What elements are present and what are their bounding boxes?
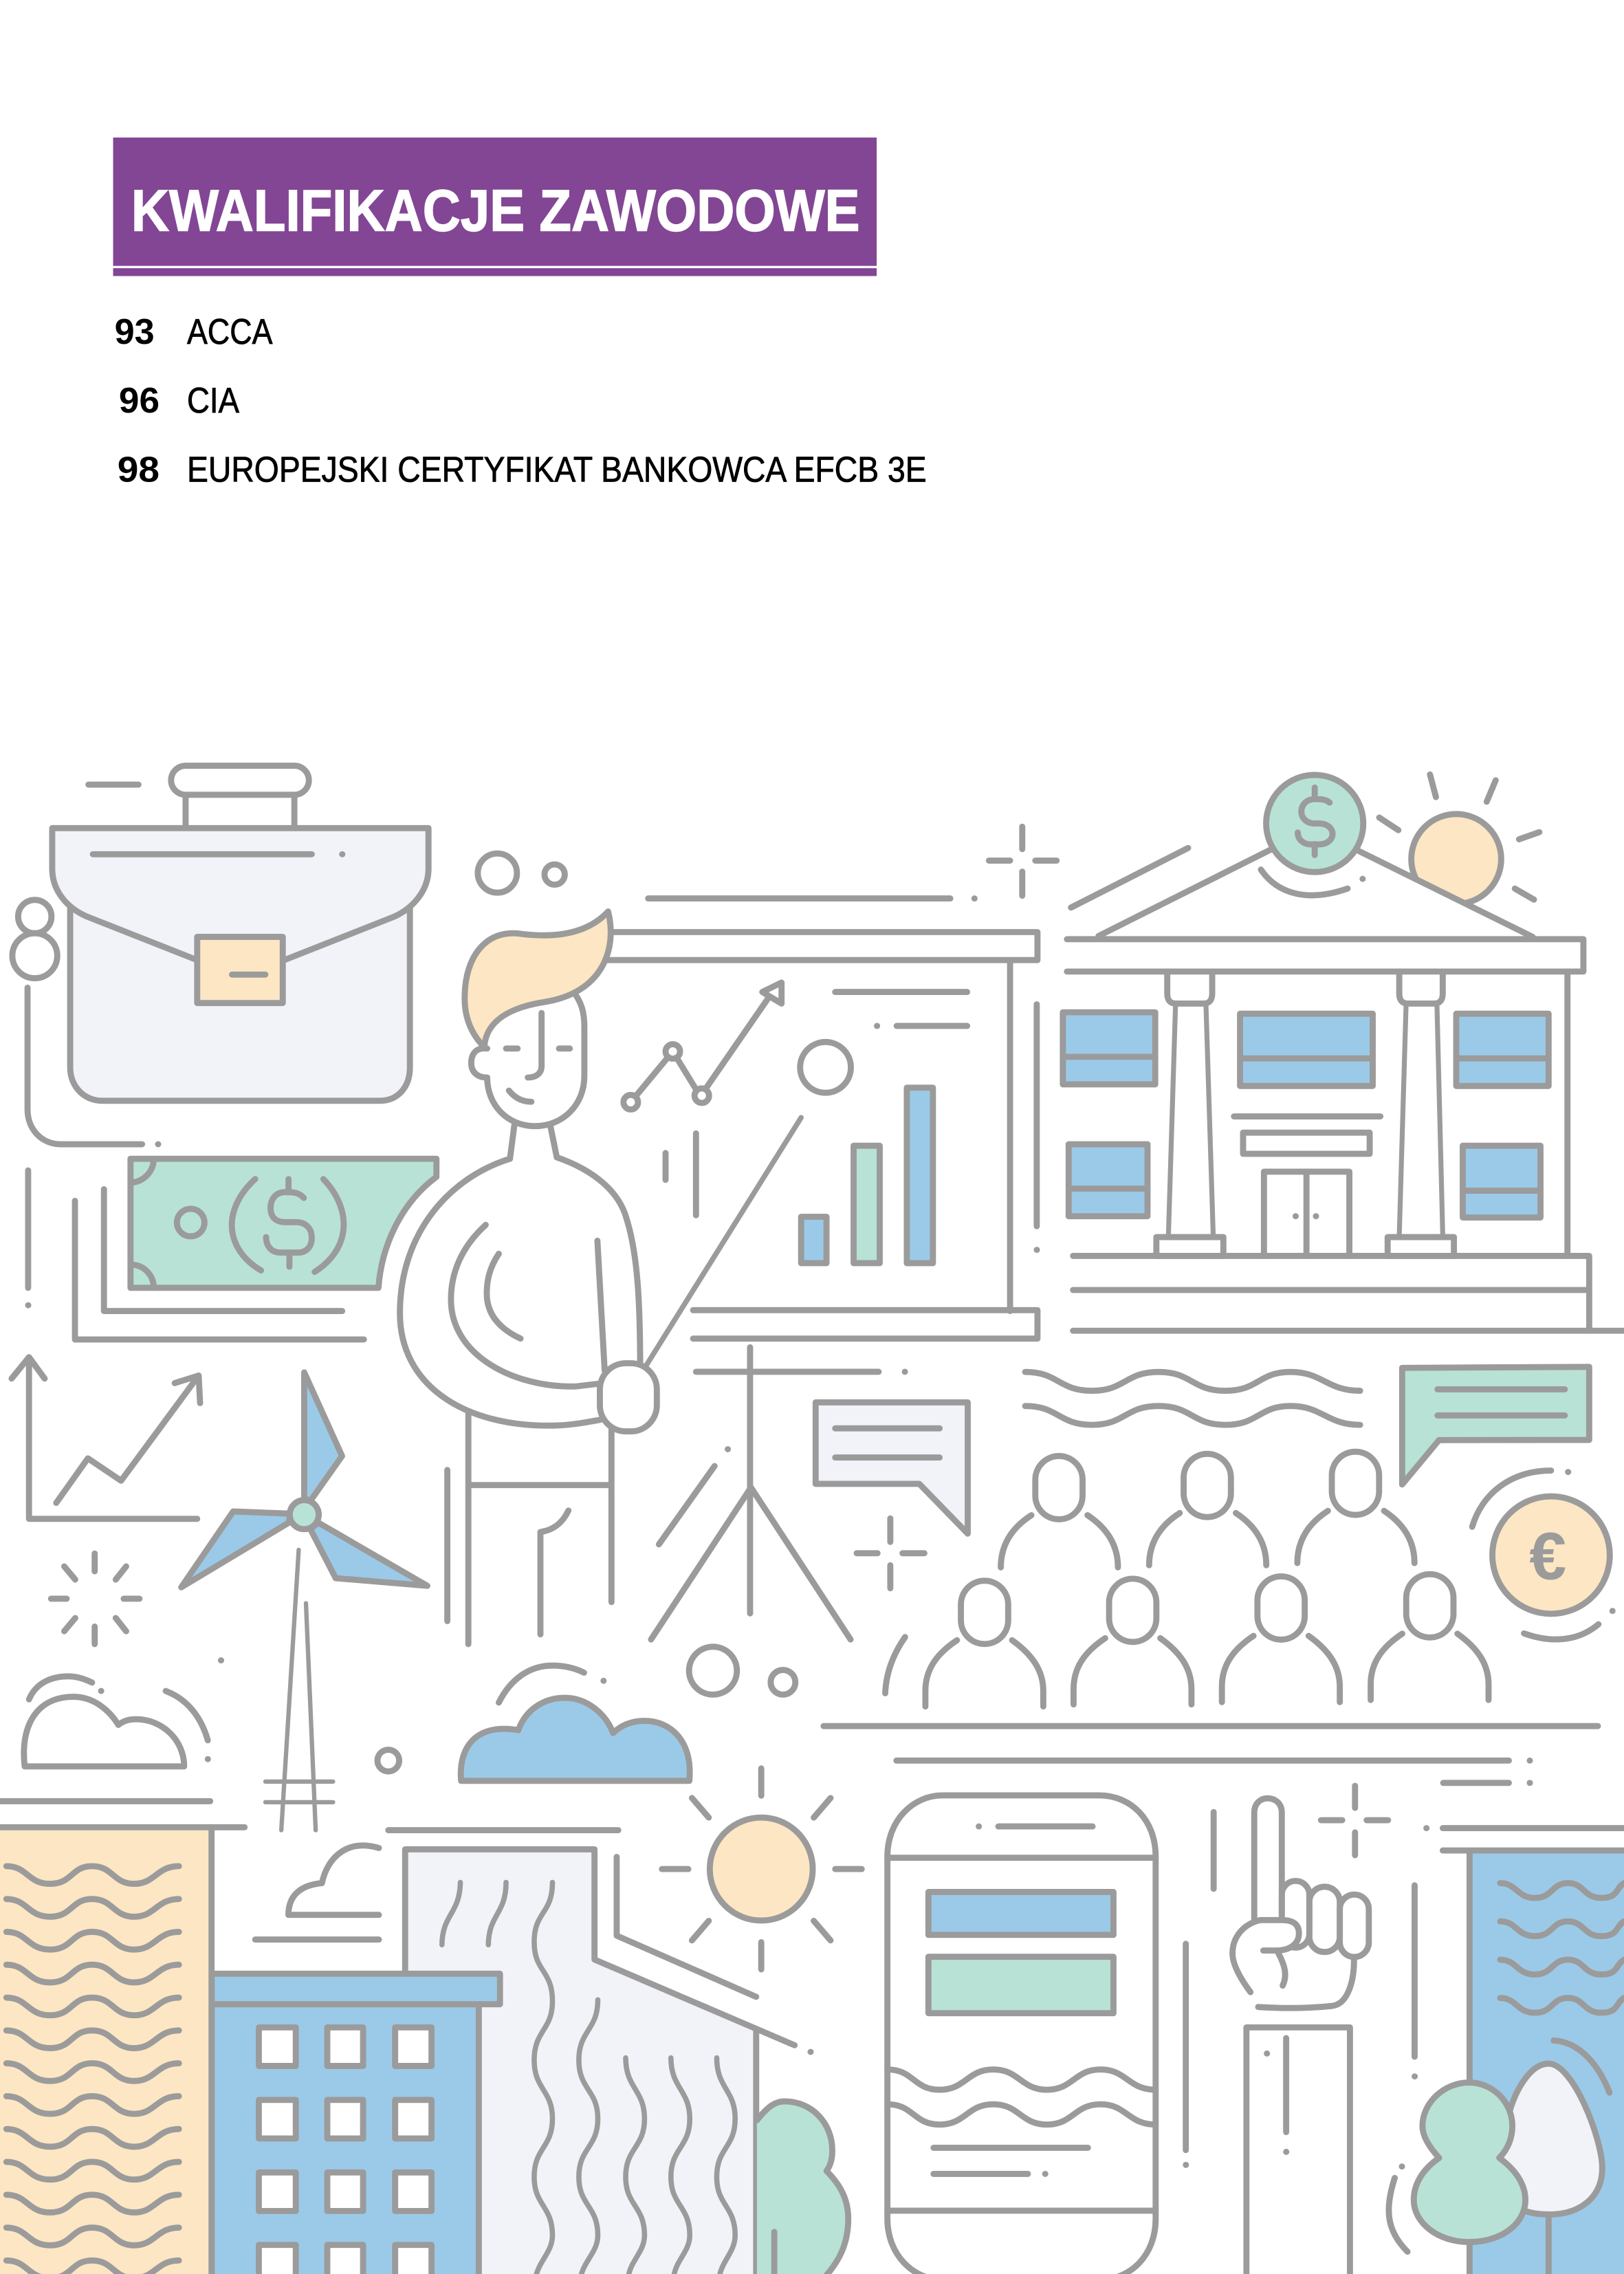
icon: growth chart — [12, 1357, 200, 1519]
icon: euro coin — [1472, 1471, 1612, 1639]
decor: horizontal rules — [824, 1726, 1598, 1783]
line chart with arrow — [624, 983, 782, 1109]
decor: sparkle and lines near bank — [989, 827, 1188, 1250]
entry 98: EUROPEJSKI CERTYFIKAT BANKOWCA EFCB 3E — [187, 449, 927, 489]
person — [1371, 1574, 1489, 1700]
decor: L-shaped lines under banknote — [75, 1189, 364, 1340]
icon: cloud outline — [24, 1676, 208, 1767]
decor: lines and sparkle around hand — [1186, 1786, 1624, 2165]
dollar coin — [1261, 775, 1363, 895]
icon: banknote — [131, 1159, 437, 1288]
presentation board — [606, 899, 1038, 1339]
decor: small circles above man — [478, 853, 564, 893]
decor: waves — [1025, 1372, 1360, 1425]
icon: bank building — [1063, 774, 1624, 1331]
entry 93: ACCA — [187, 311, 273, 351]
entry 96: CIA — [187, 380, 239, 420]
icon: euro coin: € — [1529, 1519, 1566, 1594]
entry 93 — [115, 311, 273, 351]
icon: pointing hand — [1233, 1798, 1369, 2274]
person — [1073, 1579, 1192, 1705]
building: blue right — [1442, 1850, 1624, 2274]
decor: circles near clouds — [377, 1647, 795, 1771]
man presenter — [400, 912, 801, 1644]
building: blue block — [212, 1974, 500, 2274]
building: grey slanted — [388, 1830, 811, 2274]
wavy facade — [6, 1866, 179, 2274]
icon: smartphone — [888, 1795, 1156, 2274]
white tree — [1493, 2040, 1610, 2274]
wavy facade — [1500, 1883, 1624, 2013]
person — [1001, 1456, 1118, 1567]
icon: briefcase — [52, 766, 428, 1101]
heading banner — [113, 138, 877, 276]
legs — [468, 1412, 611, 1644]
entry 98: 98 — [118, 449, 160, 489]
icon: trees — [1389, 2040, 1610, 2274]
pointer stick — [647, 1117, 801, 1365]
icon: green bush — [757, 2101, 848, 2274]
sun behind roof — [1379, 774, 1539, 904]
person — [1222, 1577, 1340, 1702]
decor: circles and connector left of briefcase — [12, 900, 158, 1305]
bar chart — [801, 1088, 933, 1263]
building: peach tower — [0, 1801, 245, 2274]
icon: sun — [662, 1769, 862, 1969]
icon: blue cloud — [461, 1665, 690, 1781]
person — [1297, 1452, 1414, 1563]
person — [1149, 1454, 1266, 1565]
entry 96 — [119, 380, 239, 420]
table of contents — [115, 311, 927, 489]
entry 96: 96 — [119, 380, 160, 420]
icon: small cloud — [255, 1846, 379, 1940]
windows grid — [259, 2027, 432, 2274]
icon: tripod stand — [651, 1347, 905, 1639]
door — [1264, 1172, 1350, 1256]
green tree — [1414, 2083, 1526, 2274]
speech bubble: green — [1402, 1367, 1589, 1485]
hair — [465, 912, 611, 1047]
face — [471, 995, 584, 1126]
audience: front row — [886, 1574, 1489, 1707]
steps — [1073, 1256, 1624, 1331]
windows — [1063, 1012, 1548, 1218]
neck — [510, 1126, 557, 1159]
speech bubble: grey — [815, 1402, 967, 1533]
decor: sparkle — [857, 1518, 924, 1588]
entry 93: 93 — [115, 311, 155, 351]
audience: back row — [1001, 1452, 1414, 1567]
title: KWALIFIKACJE ZAWODOWE — [131, 178, 860, 243]
person — [925, 1581, 1043, 1707]
torso — [400, 1159, 600, 1425]
column left — [1156, 972, 1223, 1256]
wavy lines — [442, 1882, 735, 2274]
column right — [1387, 972, 1454, 1256]
icon: wind turbine — [182, 1373, 428, 1830]
hand — [600, 1363, 657, 1432]
illustration — [0, 766, 1624, 2274]
decor: burst — [51, 1553, 221, 1661]
